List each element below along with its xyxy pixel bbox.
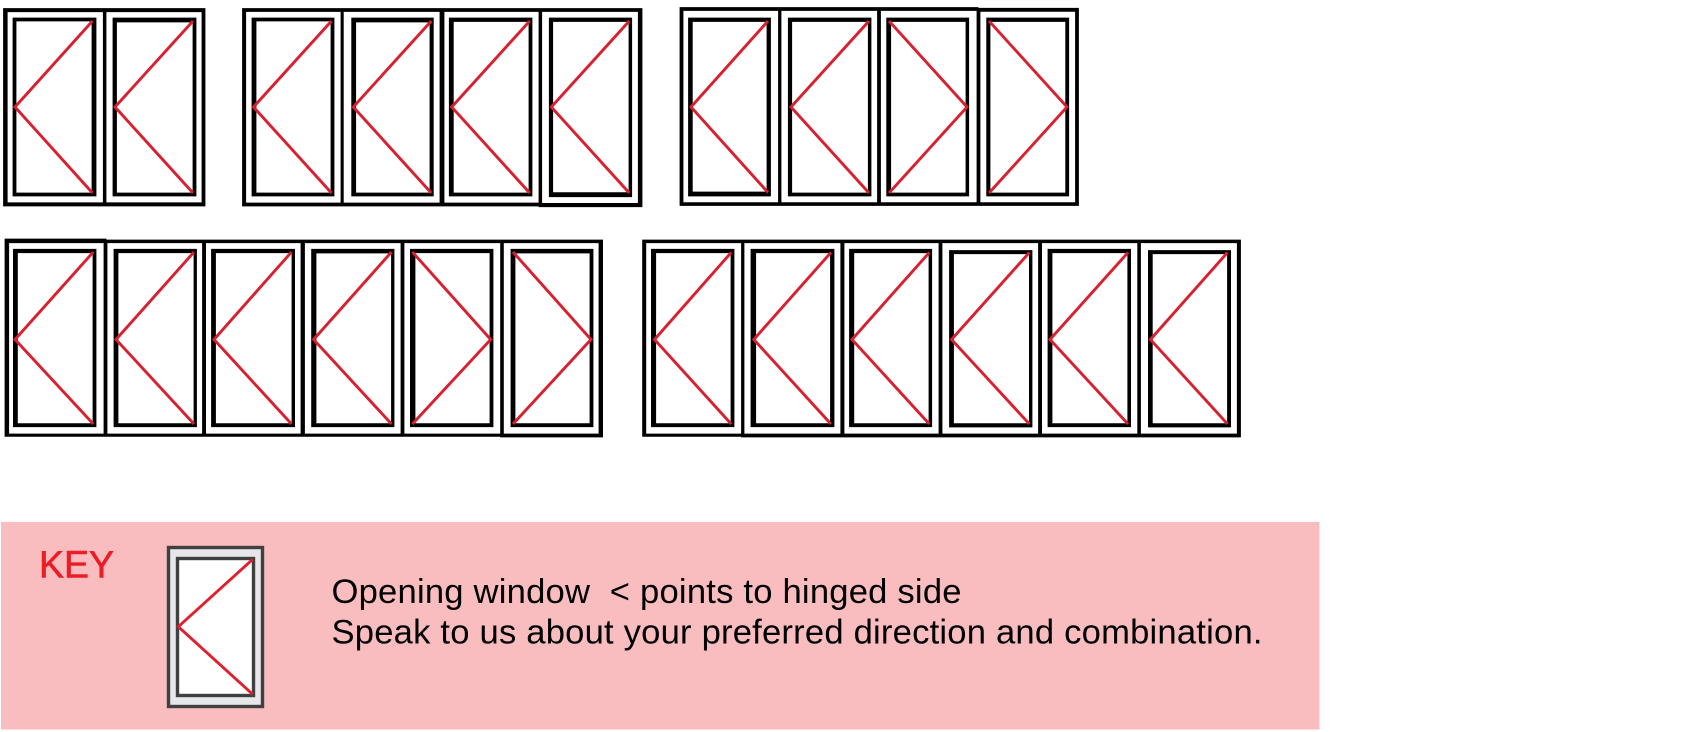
- panel: key: [1, 522, 1320, 730]
- key heading: KEY: [39, 544, 114, 586]
- six-panel bifold, four opening left and two opening right: [5, 239, 603, 437]
- key description text: Opening window < points to hinged side: [332, 573, 962, 611]
- six-panel bifold, all opening left: [643, 240, 1240, 437]
- key description text: [332, 573, 1262, 652]
- four-panel bifold, all opening left: [242, 8, 642, 207]
- two-panel bifold, both opening left: [4, 8, 205, 206]
- key description text: Speak to us about your preferred direction and combination.: [332, 614, 1262, 652]
- icon: sample opening window: [168, 548, 262, 706]
- four-panel bifold, two opening left and two opening right: [680, 8, 1078, 206]
